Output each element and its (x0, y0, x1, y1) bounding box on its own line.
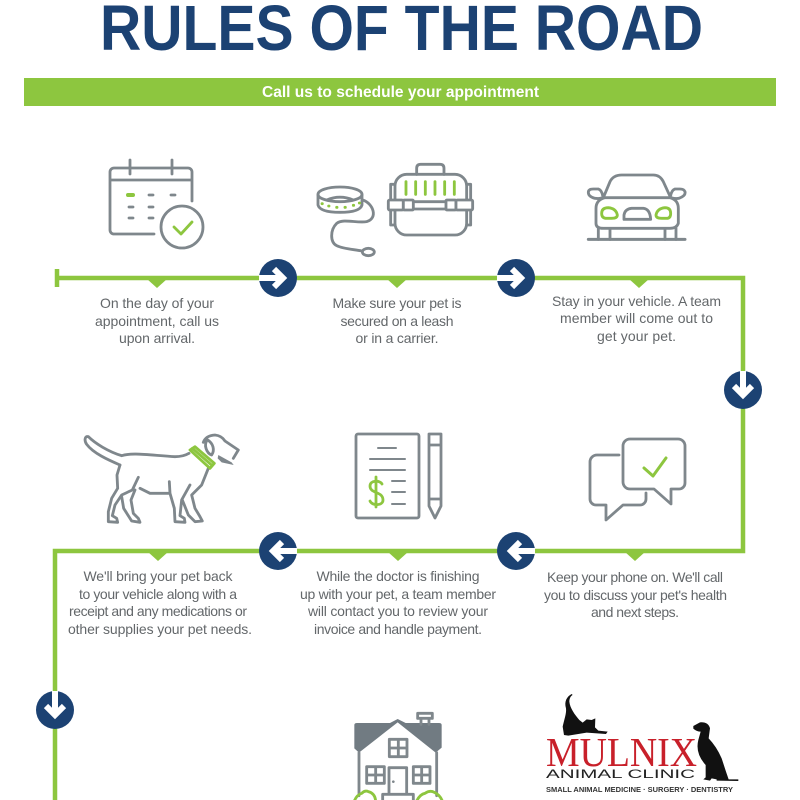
step 4: keep phone on (544, 439, 727, 620)
step text: Stay in your vehicle. A team (552, 293, 721, 309)
step text: member will come out to (560, 310, 713, 326)
pointer (147, 279, 167, 288)
dog silhouette (693, 722, 738, 781)
clinic name: MULNIX (546, 729, 697, 775)
pointer (148, 552, 168, 561)
step 1: call on arrival (95, 160, 219, 346)
step 2: leash or carrier (318, 164, 473, 346)
arrow: right 1 (259, 259, 297, 297)
arrow: left 1 (497, 532, 535, 570)
arrow: right 2 (497, 259, 535, 297)
icon: house (354, 713, 442, 800)
step 6: pet returned (68, 435, 252, 637)
step text: up with your pet, a team member (300, 586, 496, 602)
pointer (625, 552, 645, 561)
arrow: down right side (724, 371, 762, 409)
step text: Keep your phone on. We'll call (547, 569, 723, 585)
icon: pet carrier (388, 164, 473, 235)
step text: invoice and handle payment. (314, 621, 482, 637)
icon: calendar with check (110, 160, 203, 248)
step text: We'll bring your pet back (84, 568, 234, 584)
arrow: down left side (36, 691, 74, 729)
icon: invoice and pencil (356, 434, 441, 518)
pointer (629, 279, 649, 288)
step text: receipt and any medications or (69, 603, 247, 619)
step text: appointment, call us (95, 313, 219, 329)
icon: chat bubbles with check (590, 439, 685, 520)
step text: upon arrival. (119, 330, 195, 346)
clinic services: SMALL ANIMAL MEDICINE · SURGERY · DENTISTRY (546, 787, 733, 794)
banner: call to schedule: Call us to schedule your appointment (262, 84, 539, 101)
pointer (388, 552, 408, 561)
step text: to your vehicle along with a (79, 586, 237, 602)
pointer (387, 279, 407, 288)
arrow: left 2 (259, 532, 297, 570)
step text: will contact you to review your (307, 603, 488, 619)
step text: other supplies your pet needs. (68, 621, 252, 637)
logo: Mulnix Animal Clinic (546, 694, 738, 794)
step text: you to discuss your pet's health (544, 587, 727, 603)
step text: On the day of your (100, 295, 214, 311)
step 5: invoice and payment (300, 434, 496, 637)
icon: car (588, 175, 685, 239)
step text: and next steps. (591, 604, 679, 620)
icon: collar and leash (318, 187, 374, 256)
step text: secured on a leash (340, 313, 454, 329)
step text: or in a carrier. (356, 330, 438, 346)
step text: get your pet. (597, 328, 676, 344)
banner: call to schedule (24, 78, 776, 106)
cat silhouette (563, 694, 608, 736)
step text: Make sure your pet is (332, 295, 462, 311)
icon: dog with collar (85, 435, 238, 522)
step text: While the doctor is finishing (316, 568, 480, 584)
step 3: stay in vehicle (552, 175, 721, 344)
road line connecting the steps (55, 269, 743, 800)
clinic subtitle: ANIMAL CLINIC (546, 767, 696, 781)
